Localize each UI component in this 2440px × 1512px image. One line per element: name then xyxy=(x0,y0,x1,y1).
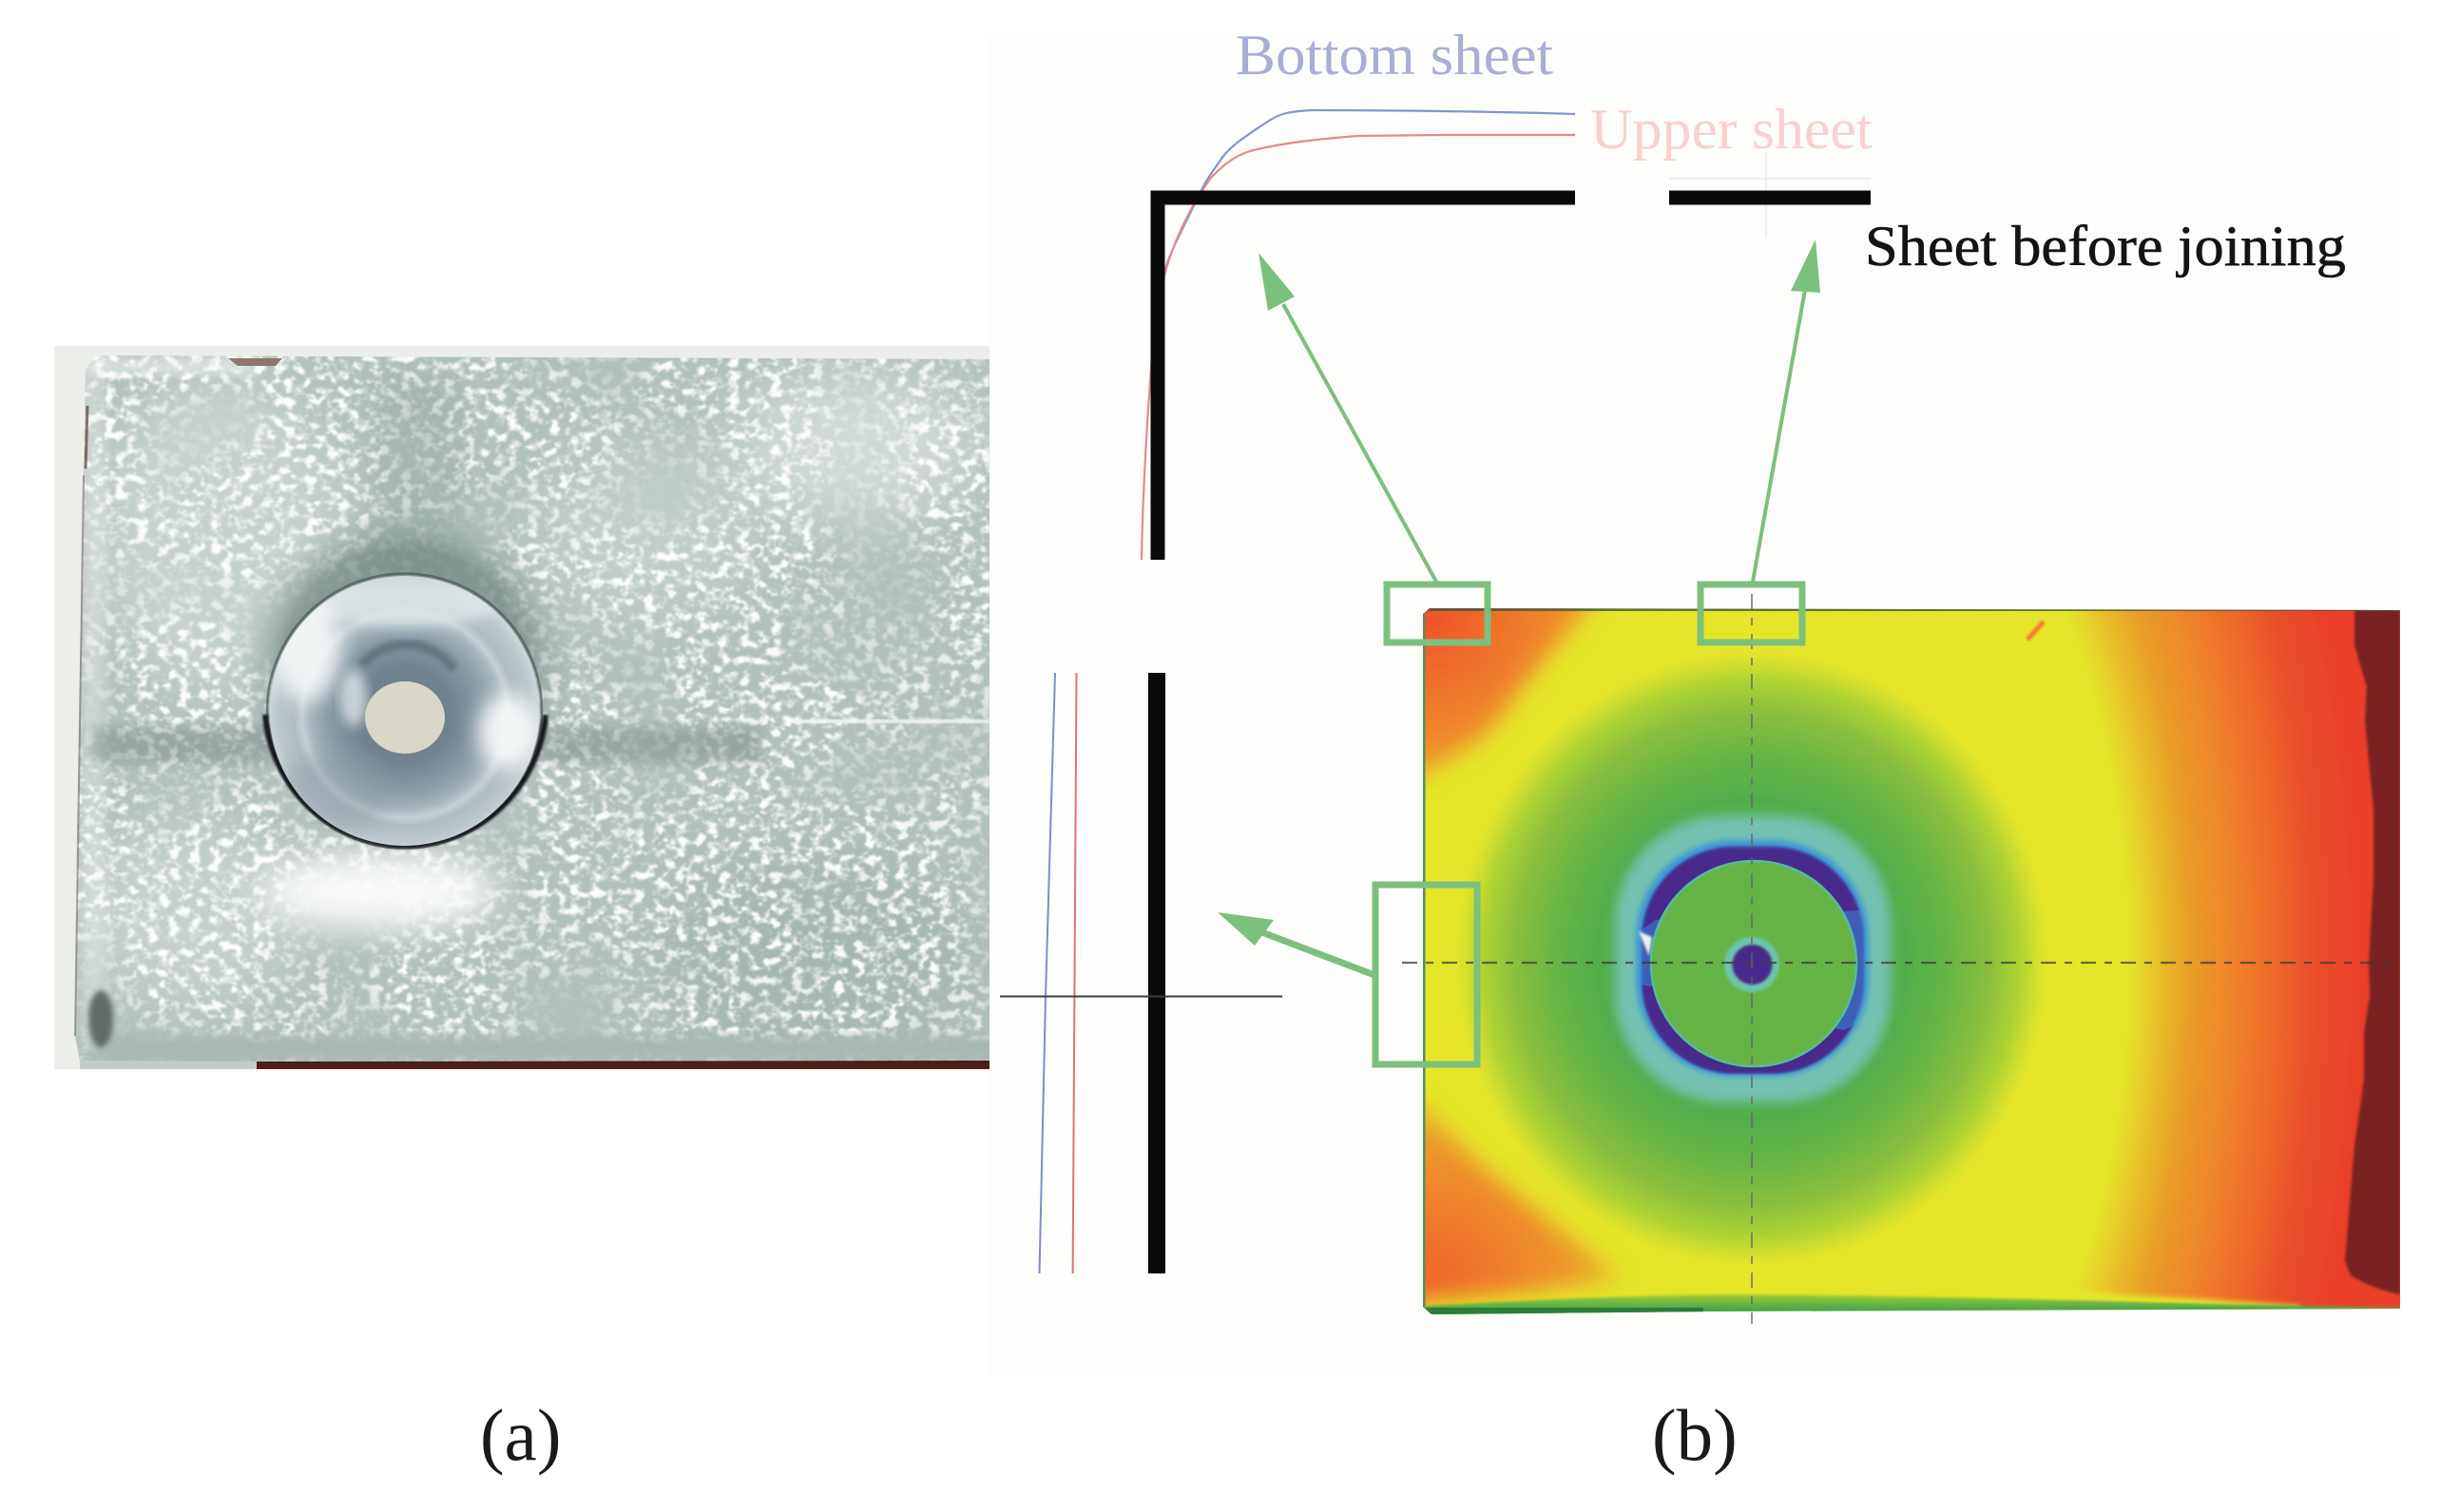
centre line: vertical xyxy=(1751,594,1753,1324)
bottom edge of sheet xyxy=(257,1061,989,1069)
green zone around joint xyxy=(1453,649,2050,1269)
line: bottom sheet profile, left edge xyxy=(1040,673,1055,1273)
top edge dark line xyxy=(1424,606,2400,611)
rivet head xyxy=(265,574,546,848)
arrow: corner box to corner profile xyxy=(1258,253,1436,582)
heat map: deformation contour xyxy=(1369,551,2405,1324)
dark red zone: right edge xyxy=(2345,608,2400,1294)
label: Sheet before joining: Sheet before joining xyxy=(1865,215,2346,278)
orange zone: bottom-left corner xyxy=(1426,1099,1620,1308)
caption: (a): (a) xyxy=(480,1394,561,1476)
line: upper sheet deformed profile, corner xyxy=(1142,135,1575,560)
teal ring around centre xyxy=(1724,937,1779,992)
faint guide lines behind top sheet xyxy=(1669,152,1871,238)
dark zone above rivet xyxy=(375,375,461,575)
highlight box: top centre xyxy=(1700,584,1802,642)
dark stain bottom-left corner xyxy=(88,990,113,1047)
line: section reference xyxy=(1000,996,1282,998)
highlight box: top-left corner xyxy=(1387,584,1488,642)
bright glare under rivet xyxy=(261,853,499,929)
photo: riveted galvanised sheet xyxy=(54,346,1004,1069)
sheet before joining: top corner outline xyxy=(1158,198,1871,560)
line: bottom sheet deformed profile, corner xyxy=(1158,110,1575,380)
centre purple dot xyxy=(1732,945,1772,985)
yellow strip along bottom edge, right xyxy=(1812,1291,2302,1311)
panel: off-white background of part b xyxy=(989,34,2400,1378)
rivet centre hole xyxy=(365,681,445,754)
arrow: top box to top profile xyxy=(1753,239,1820,582)
arrow: left box to left profile xyxy=(1218,912,1374,975)
dark band left of rivet xyxy=(91,727,272,763)
dark band right of rivet xyxy=(542,727,760,763)
label: Bottom sheet: Bottom sheet xyxy=(1236,24,1553,86)
inner blue ring xyxy=(1642,846,1864,1074)
caption: (b): (b) xyxy=(1652,1394,1738,1476)
label: Upper sheet: Upper sheet xyxy=(1590,98,1873,161)
purple crescent xyxy=(1643,848,1863,1073)
broad light and dark areas of the sheet xyxy=(95,371,342,694)
small mark near top edge xyxy=(2027,622,2044,640)
centre line: horizontal xyxy=(1402,962,2400,964)
teal halo ring xyxy=(1615,815,1891,1102)
orange zone: top-left corner xyxy=(1423,608,1602,788)
central green disc xyxy=(1651,861,1856,1066)
line: upper sheet profile, left edge xyxy=(1073,673,1076,1273)
sheet before joining: left edge xyxy=(1148,673,1165,1273)
blue ring xyxy=(1636,840,1869,1077)
white glint on ring xyxy=(1639,931,1652,956)
highlight box: left edge xyxy=(1375,885,1477,1064)
scratch line on sheet xyxy=(794,719,989,723)
bottom edge green band xyxy=(1416,1294,2400,1316)
